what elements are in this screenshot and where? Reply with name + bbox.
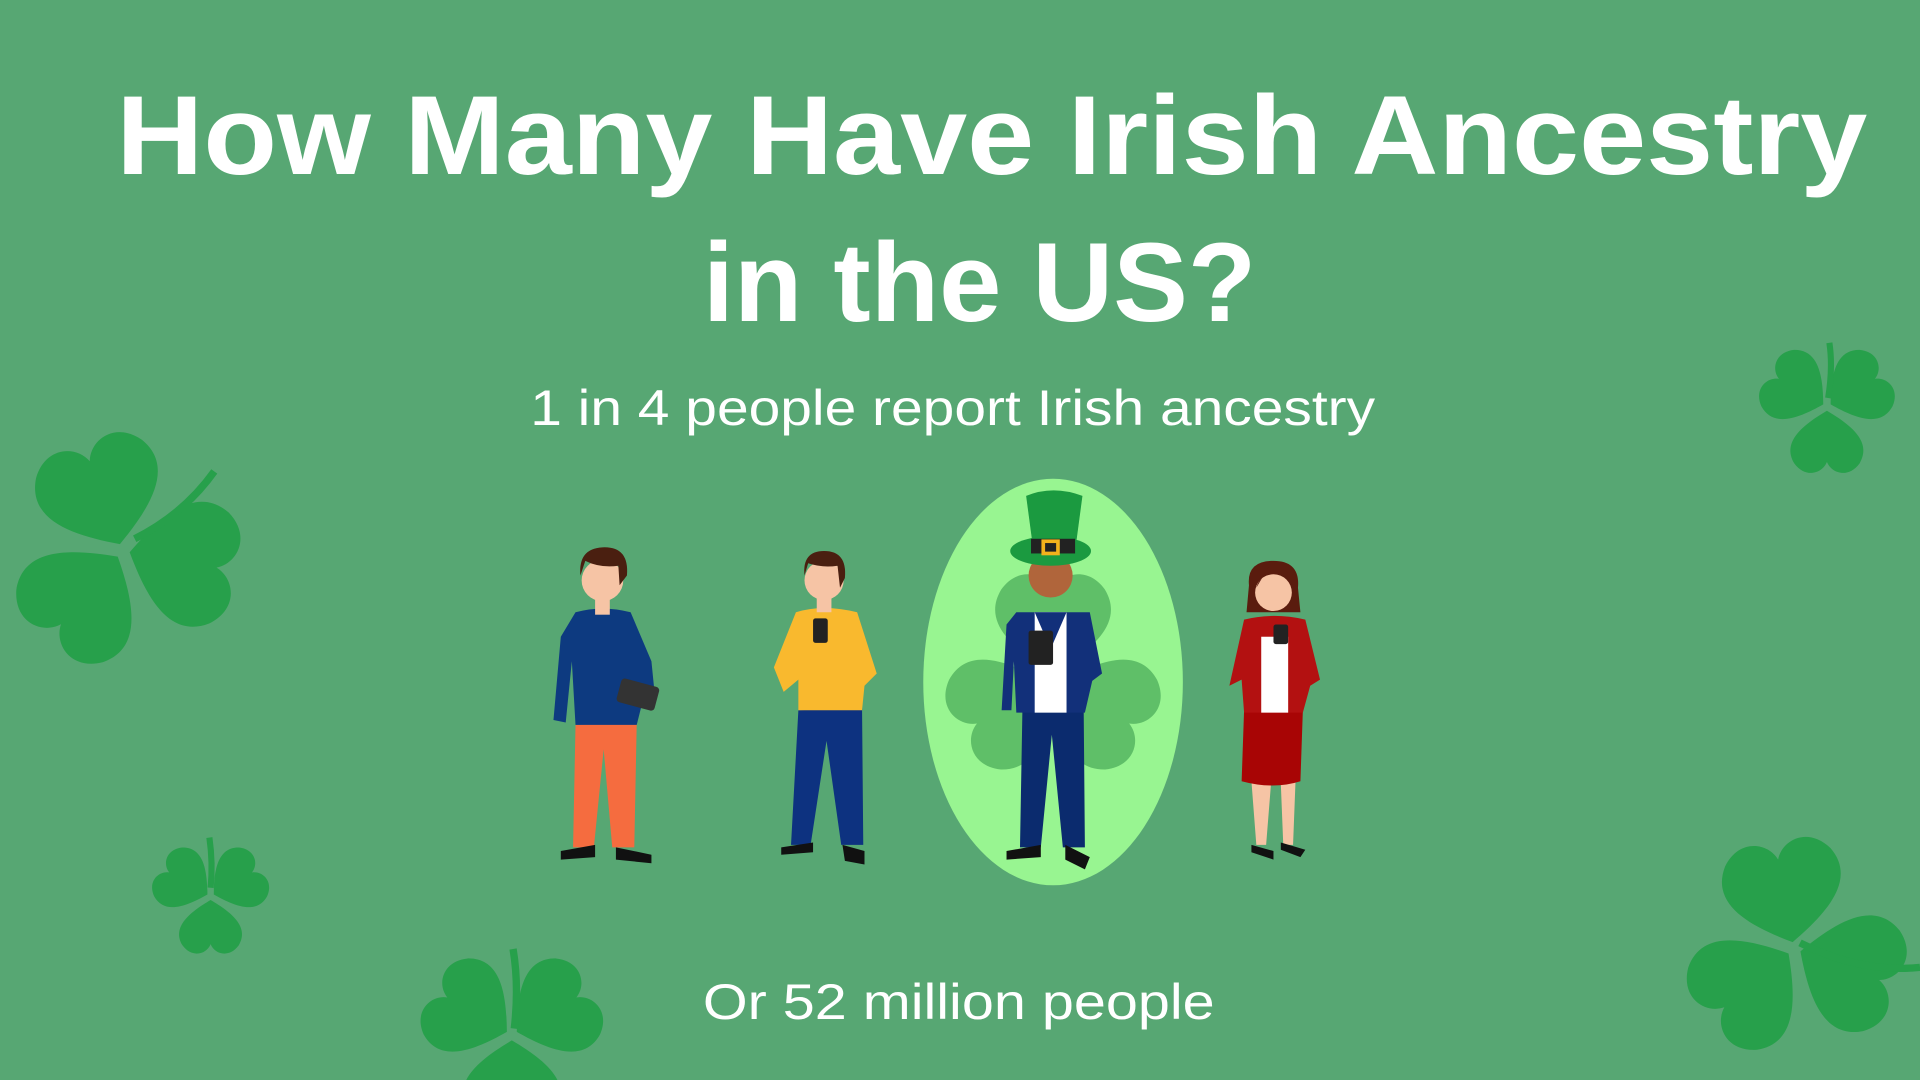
shamrock: bottom right [1653,820,1920,1075]
person 3: leprechaun man [1002,490,1102,869]
shamrock: left large [0,399,283,701]
highlight oval [923,479,1183,885]
shamrock: bottom left small [145,838,276,954]
person 4: woman red suit [1229,561,1320,860]
title [116,72,1868,345]
title: How Many Have Irish Ancestry [116,72,1868,198]
person 2: man yellow shirt [774,551,877,864]
person 1: man blue shirt orange pants [553,547,660,863]
subtitle: 1 in 4 people report Irish ancestry [530,380,1375,436]
shamrock: top right [1751,342,1903,473]
shamrock: bottom center [410,948,614,1080]
title: in the US? [703,219,1256,345]
bottom caption: Or 52 million people [703,974,1215,1030]
